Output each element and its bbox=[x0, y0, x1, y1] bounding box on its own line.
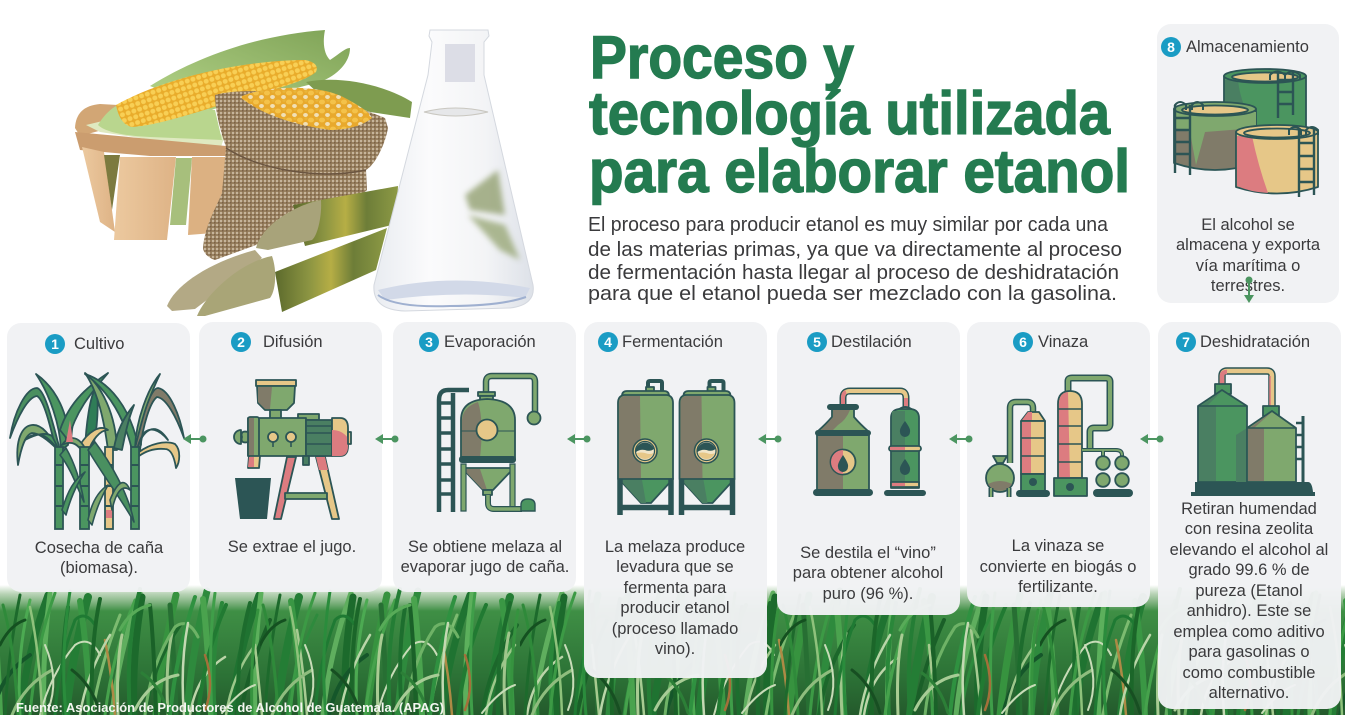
intro paragraph: de fermentación hasta llegar al proceso de deshidratación bbox=[588, 261, 1119, 284]
step text 1: (biomasa). bbox=[60, 559, 138, 577]
step text 7: como combustible bbox=[1183, 664, 1315, 682]
panel 1: Cultivo bbox=[7, 323, 190, 592]
step text 6: fertilizante. bbox=[1018, 578, 1098, 596]
step text 7: Retiran humendad bbox=[1181, 500, 1317, 518]
basket back and rim bbox=[75, 104, 118, 136]
panel 5: Destilación bbox=[777, 322, 960, 615]
icon: sugarcane bbox=[10, 373, 184, 529]
icon: storage tanks bbox=[1174, 69, 1318, 197]
step heading 6: 6 bbox=[1019, 334, 1027, 350]
step text 8: almacena y exporta bbox=[1176, 236, 1321, 254]
step text 3: Se obtiene melaza al bbox=[408, 538, 562, 556]
step heading 7: Deshidratación bbox=[1200, 333, 1310, 351]
icon: evaporator tank bbox=[439, 376, 540, 512]
sugarcane stalks bbox=[293, 186, 398, 246]
background photo: sugarcane field bbox=[0, 585, 1345, 715]
intro paragraph bbox=[588, 213, 1122, 305]
step text 8: vía marítima o bbox=[1196, 257, 1300, 275]
panel 7: Deshidratación bbox=[1158, 322, 1341, 709]
corn kernels in sack bbox=[240, 88, 372, 130]
step heading 8: Almacenamiento bbox=[1186, 38, 1309, 56]
step heading 2: 2 bbox=[237, 334, 245, 350]
step text 5: Se destila el “vino” bbox=[800, 544, 936, 562]
corn cob bbox=[116, 60, 317, 127]
step text 4: levadura que se bbox=[616, 558, 734, 576]
step heading 1: Cultivo bbox=[74, 335, 124, 353]
step heading 2: Difusión bbox=[263, 333, 323, 351]
basket slats bbox=[75, 132, 226, 156]
step text 7: anhidro). Este se bbox=[1187, 602, 1311, 620]
step text 4: fermenta para bbox=[624, 579, 727, 597]
arrow: step 2 to 1 bbox=[183, 434, 206, 444]
icon: vinasse plant bbox=[986, 378, 1133, 497]
glass flask bbox=[374, 30, 533, 311]
step text 1: Cosecha de caña bbox=[35, 539, 164, 557]
panel 2: Difusión bbox=[199, 322, 382, 592]
step text 7: pureza (Etanol bbox=[1195, 582, 1303, 600]
step text 4: La melaza produce bbox=[605, 538, 745, 556]
right husk bbox=[306, 80, 412, 118]
title: Proceso y bbox=[590, 24, 855, 91]
arrow: step 7 to 6 bbox=[1140, 434, 1164, 444]
step heading 3: 3 bbox=[425, 334, 433, 350]
arrow: step 5 to 4 bbox=[758, 434, 782, 444]
step text 4: vino). bbox=[655, 640, 695, 658]
arrow: step 7 to 8 bbox=[1244, 276, 1254, 303]
step text 7: grado 99.6 % de bbox=[1188, 561, 1310, 579]
step heading 4: 4 bbox=[604, 334, 612, 350]
step text 5: puro (96 %). bbox=[823, 585, 913, 603]
step heading 5: Destilación bbox=[831, 333, 912, 351]
icon: distillation still bbox=[813, 391, 926, 496]
photo: corn, sack, sugarcane and flask bbox=[75, 30, 533, 316]
arrow: step 3 to 2 bbox=[375, 434, 398, 444]
burlap sack bbox=[203, 91, 388, 260]
step text 4: producir etanol bbox=[620, 599, 730, 617]
step heading 7: 7 bbox=[1182, 334, 1190, 350]
panel 6: Vinaza bbox=[967, 322, 1150, 607]
step heading 8: 8 bbox=[1167, 39, 1175, 55]
step heading 1: 1 bbox=[51, 336, 59, 352]
title bbox=[589, 24, 1130, 205]
step heading 5: 5 bbox=[813, 334, 821, 350]
step text 7: para gasolinas o bbox=[1188, 643, 1310, 661]
step text 2: Se extrae el jugo. bbox=[228, 538, 356, 556]
step heading 1 bbox=[45, 334, 124, 354]
step heading 6: Vinaza bbox=[1038, 333, 1089, 351]
arrow: step 4 to 3 bbox=[567, 434, 590, 444]
panel 3: Evaporación bbox=[393, 322, 576, 592]
step text 6: La vinaza se bbox=[1012, 537, 1104, 555]
intro paragraph: para que el etanol pueda ser mezclado con la gasolina. bbox=[588, 282, 1117, 305]
cane seen through flask bbox=[465, 170, 505, 215]
step text 7: alternativo. bbox=[1209, 684, 1289, 702]
step heading 2 bbox=[231, 332, 323, 352]
sugarcane cut faces bbox=[167, 250, 262, 311]
step text 7: emplea como aditivo bbox=[1173, 623, 1325, 641]
panel 4: Fermentación bbox=[584, 322, 767, 678]
intro paragraph: de las materias primas, ya que va directamente al proceso bbox=[588, 238, 1122, 261]
title: tecnología utilizada bbox=[589, 80, 1111, 147]
step text 8: El alcohol se bbox=[1201, 216, 1295, 234]
step heading 5 bbox=[807, 332, 912, 352]
leaf bbox=[98, 100, 222, 140]
icon: extraction mill bbox=[234, 380, 351, 519]
step heading 4: Fermentación bbox=[622, 333, 723, 351]
source note: Fuente: Asociación de Productores de Alcohol de Guatemala. (APAG) bbox=[16, 701, 444, 715]
step text 5: para obtener alcohol bbox=[793, 564, 943, 582]
back husk bbox=[150, 30, 350, 110]
panel 8: Almacenamiento bbox=[1157, 24, 1339, 303]
icon: fermentation tanks bbox=[618, 381, 734, 515]
step heading 3: Evaporación bbox=[444, 333, 536, 351]
step text 4: (proceso llamado bbox=[612, 620, 738, 638]
step text 7: con resina zeolita bbox=[1185, 520, 1314, 538]
arrow: step 6 to 5 bbox=[949, 434, 972, 444]
intro paragraph: El proceso para producir etanol es muy similar por cada una bbox=[588, 213, 1109, 236]
step text 6: convierte en biogás o bbox=[980, 558, 1136, 576]
step text 8: terrestres. bbox=[1211, 277, 1285, 295]
icon: dehydration silos bbox=[1191, 371, 1315, 496]
step text 3: evaporar jugo de caña. bbox=[401, 558, 569, 576]
title: para elaborar etanol bbox=[589, 138, 1130, 205]
step text 7: elevando el alcohol al bbox=[1170, 541, 1328, 559]
step heading 6 bbox=[1013, 332, 1089, 352]
